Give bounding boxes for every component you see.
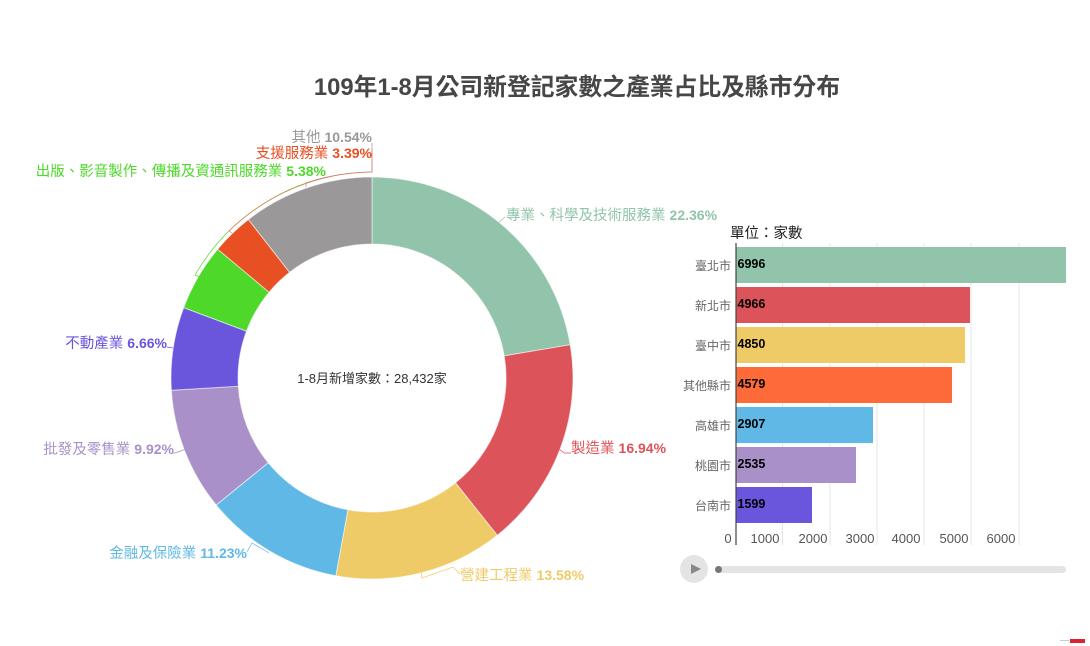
segment: 出版、影音製作、傳播及資通訊服務業 — [184, 249, 269, 331]
bar: 台南市: 台南市 — [695, 498, 731, 513]
bar: 臺北市 — [695, 247, 1066, 283]
y axis — [735, 243, 737, 545]
bar: 臺中市: 4850 — [738, 337, 765, 351]
leader lines — [167, 143, 571, 578]
bar: 桃園市 — [695, 447, 856, 483]
bar: 新北市: 4966 — [738, 297, 765, 311]
segment: 其他 — [248, 177, 372, 272]
play button — [680, 555, 708, 583]
label: 製造業: 製造業 16.94% — [571, 440, 667, 457]
bar chart — [683, 225, 1066, 546]
bar: 新北市 — [695, 287, 970, 323]
bar: 臺中市 — [695, 327, 965, 363]
bar: 高雄市: 2907 — [738, 417, 765, 431]
unit label: 單位：家數 — [730, 225, 803, 242]
label: 其他: 其他 10.54% — [291, 129, 373, 146]
label: 專業、科學及技術服務業: 專業、科學及技術服務業 22.36% — [506, 206, 718, 224]
bar: 台南市: 1599 — [738, 497, 765, 511]
donut chart — [171, 177, 573, 579]
bar: 臺中市: 臺中市 — [695, 338, 731, 353]
progress track — [715, 566, 1066, 573]
segment: 製造業 — [456, 345, 573, 535]
label: 不動產業: 不動產業 6.66% — [65, 335, 168, 352]
bar: 新北市: 新北市 — [695, 298, 731, 313]
bar: 高雄市: 高雄市 — [695, 418, 731, 433]
bar: 臺北市: 6996 — [738, 257, 765, 271]
timeline player — [680, 555, 1066, 583]
x axis ticks: 6000 — [987, 531, 1015, 546]
label: 批發及零售業: 批發及零售業 9.92% — [43, 441, 175, 458]
bar: 其他縣市: 其他縣市 — [683, 378, 731, 393]
bar: 臺北市: 臺北市 — [695, 258, 731, 273]
segment: 金融及保險業 — [216, 463, 348, 576]
x axis ticks — [724, 531, 1015, 546]
segment: 批發及零售業 — [171, 386, 268, 505]
label: 營建工程業: 營建工程業 13.58% — [460, 567, 585, 584]
x axis ticks: 5000 — [940, 531, 968, 546]
x axis ticks: 1000 — [751, 531, 779, 546]
title: 109年1-8月公司新登記家數之產業占比及縣市分布 — [314, 73, 840, 101]
bar: 其他縣市 — [683, 367, 952, 403]
bar: 桃園市: 桃園市 — [695, 458, 731, 473]
x axis ticks: 4000 — [892, 531, 920, 546]
bar: 高雄市 — [695, 407, 873, 443]
watermark — [1060, 639, 1085, 643]
x axis ticks: 0 — [724, 531, 732, 546]
label: 出版、影音製作、傳播及資通訊服務業: 出版、影音製作、傳播及資通訊服務業 5.38% — [36, 163, 327, 180]
segment: 不動產業 — [171, 308, 246, 390]
segment: 營建工程業 — [336, 483, 497, 579]
x axis ticks: 2000 — [799, 531, 827, 546]
x axis ticks: 3000 — [846, 531, 874, 546]
bar: 台南市 — [695, 487, 812, 523]
segment: 支援服務業 — [218, 220, 290, 292]
label: 支援服務業: 支援服務業 3.39% — [256, 145, 373, 162]
bar: 桃園市: 2535 — [738, 457, 765, 471]
segment: 專業、科學及技術服務業 — [372, 177, 570, 356]
donut center label: 1-8月新增家數：28,432家 — [297, 371, 447, 386]
label: 金融及保險業: 金融及保險業 11.23% — [109, 545, 248, 562]
bar: 其他縣市: 4579 — [738, 377, 765, 391]
